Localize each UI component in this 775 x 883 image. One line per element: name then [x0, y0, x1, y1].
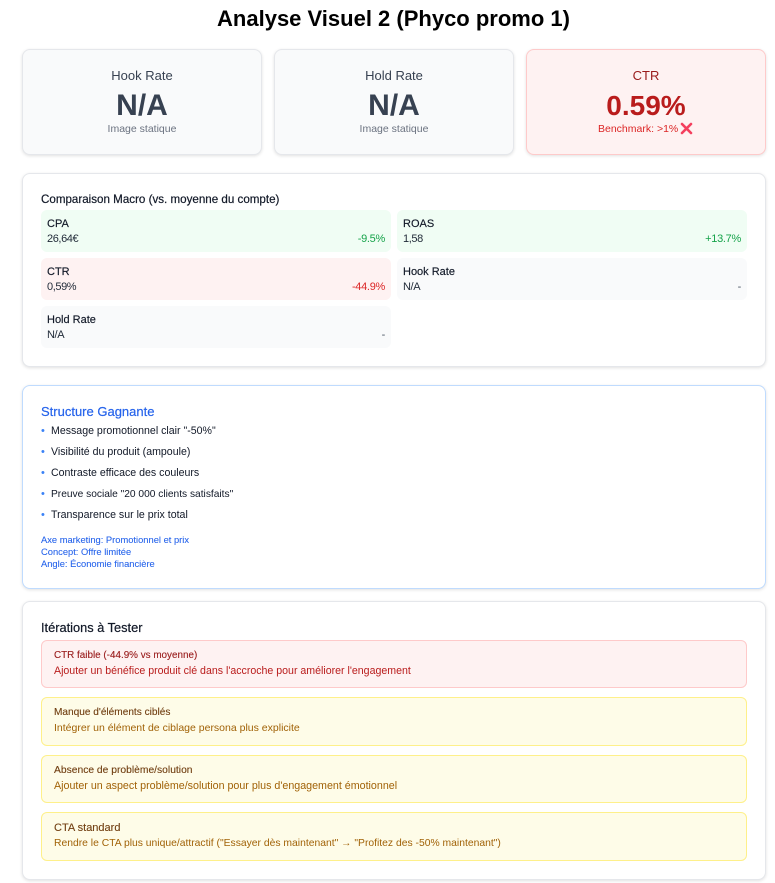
KPI note: Hook Rate: Image statique [108, 123, 176, 135]
KPI label: CTR: CTR [633, 68, 659, 83]
KPI card: Hold Rate [274, 49, 514, 155]
metric: Hold Rate: Hold Rate [47, 314, 96, 326]
metric: CPA: 26,64€ [47, 233, 78, 245]
KPI card: CTR [526, 49, 766, 155]
metric: ROAS: 1,58 [403, 233, 423, 245]
marketing notes [41, 535, 189, 569]
iteration: CTR faible: CTR faible (-44.9% vs moyenne) [54, 650, 197, 661]
iteration: Absence de problème/solution: Ajouter un aspect problème/solution pour plus d'engagement émotionnel [54, 780, 397, 792]
metric: CTR: -44.9% [352, 281, 385, 293]
title: Analyse Visuel 2 (Phyco promo 1) [217, 6, 570, 31]
marketing notes: Angle: Économie financière [41, 559, 155, 569]
KPI note: benchmark: Benchmark: >1% [598, 123, 678, 135]
bullet list: • [41, 425, 45, 437]
iteration: CTA standard [41, 812, 747, 861]
iteration: Manque d'éléments ciblés [41, 697, 747, 746]
metric: Hook Rate [397, 258, 747, 300]
KPI card: Hook Rate [22, 49, 262, 155]
iteration: CTR faible: Ajouter un bénéfice produit clé dans l'accroche pour améliorer l'engagement [54, 665, 411, 677]
metric: CPA: CPA [47, 218, 69, 230]
KPI note: Hold Rate: Image statique [360, 123, 428, 135]
iteration: Manque d'éléments ciblés: Manque d'éléments ciblés [54, 707, 170, 718]
metric: CPA: -9.5% [358, 233, 385, 245]
iterations heading: Itérations à Tester [41, 620, 142, 635]
panel: iterations [22, 601, 766, 880]
iteration: Absence de problème/solution: Absence de problème/solution [54, 765, 193, 776]
metric: ROAS [397, 210, 747, 252]
bullet list: Visibilité du produit (ampoule) [51, 446, 190, 458]
bullet list: • [41, 509, 45, 521]
bullet list: Contraste efficace des couleurs [51, 467, 199, 479]
KPI label: Hook Rate: Hook Rate [111, 68, 173, 83]
metric: ROAS: +13.7% [705, 233, 741, 245]
metric: CPA [41, 210, 391, 252]
metric: Hook Rate: N/A [403, 281, 420, 293]
marketing notes: Axe marketing: Promotionnel et prix [41, 535, 189, 545]
iteration: CTA standard: CTA standard [54, 822, 120, 834]
metric: Hook Rate: - [738, 281, 741, 293]
metric: Hold Rate: N/A [47, 329, 64, 341]
metric: Hold Rate [41, 306, 391, 348]
metric: CTR [41, 258, 391, 300]
metric: CTR: 0,59% [47, 281, 76, 293]
metric: Hook Rate: Hook Rate [403, 266, 455, 278]
iteration: CTA standard: Rendre le CTA plus unique/attractif ("Essayer dès maintenant" → "Profitez des -50% maintenant") [54, 838, 501, 849]
bullet list: Transparence sur le prix total [51, 509, 188, 521]
bullet list [41, 425, 233, 521]
KPI label: Hold Rate: Hold Rate [365, 68, 423, 83]
macro comparison heading: Comparaison Macro (vs. moyenne du compte) [41, 193, 279, 206]
winning structure heading: Structure Gagnante [41, 404, 154, 419]
KPI value: Hook Rate: N/A [116, 89, 168, 122]
bullet list: Message promotionnel clair "-50%" [51, 425, 216, 437]
iteration: Manque d'éléments ciblés: Intégrer un élément de ciblage persona plus explicite [54, 722, 300, 734]
bullet list: Preuve sociale "20 000 clients satisfaits" [51, 489, 233, 500]
iteration: Absence de problème/solution [41, 755, 747, 803]
panel: macro comparison [22, 173, 766, 367]
metric: ROAS: ROAS [403, 218, 434, 230]
metric: CTR: CTR [47, 266, 70, 278]
iteration: CTR faible [41, 640, 747, 688]
icon: cross mark [680, 122, 692, 134]
bullet list: • [41, 446, 45, 458]
panel: winning structure [22, 385, 766, 589]
bullet list: • [41, 488, 45, 500]
marketing notes: Concept: Offre limitée [41, 547, 131, 557]
bullet list: • [41, 467, 45, 479]
KPI value: CTR: 0.59% [606, 90, 686, 121]
metric: Hold Rate: - [382, 329, 385, 341]
KPI value: Hold Rate: N/A [368, 89, 420, 122]
